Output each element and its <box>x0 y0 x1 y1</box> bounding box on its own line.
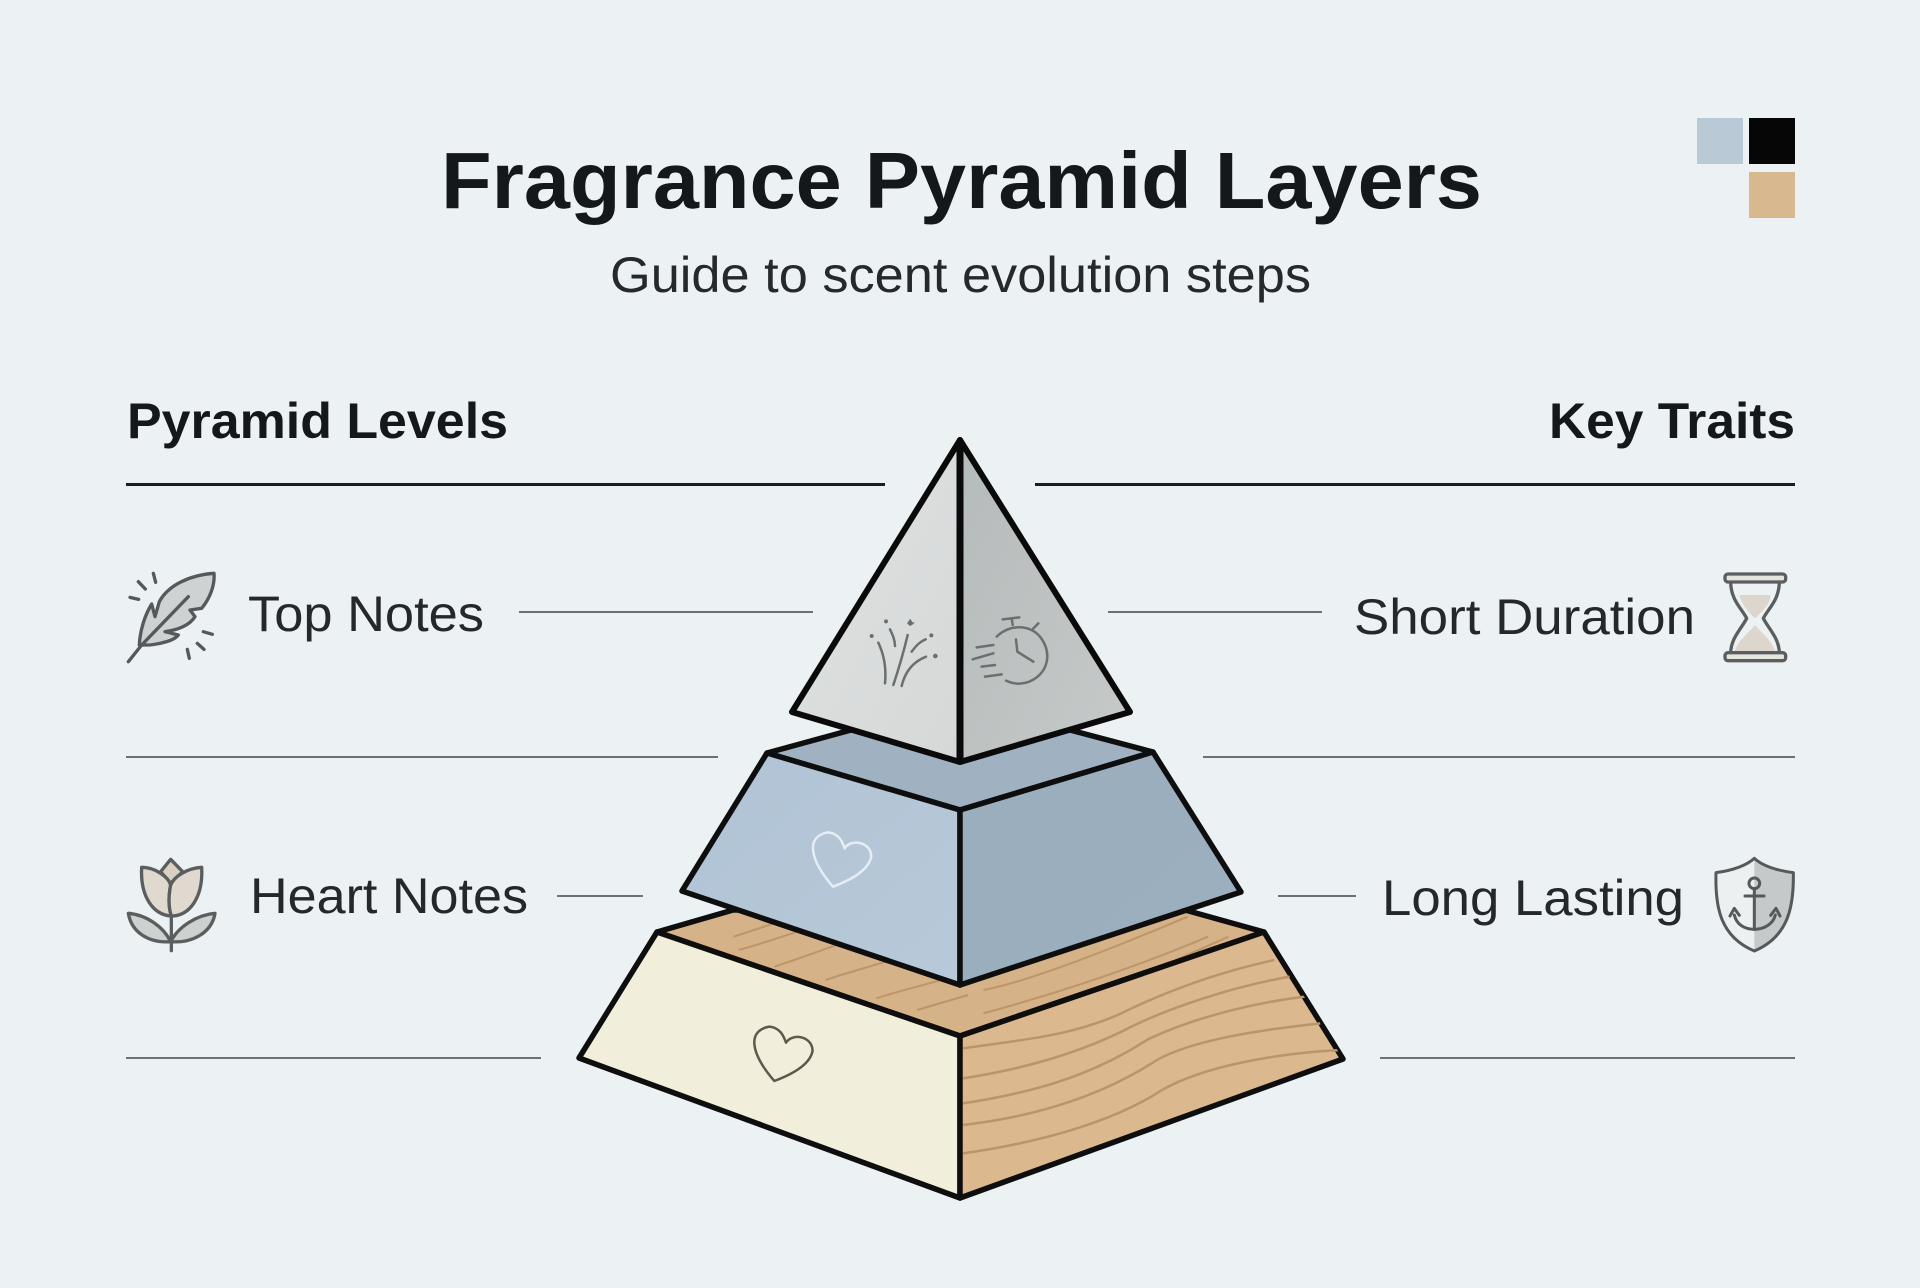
icon: stopwatch <box>973 617 1047 684</box>
colour swatches <box>1697 118 1795 218</box>
middle top plate <box>767 730 1153 810</box>
base right face <box>960 932 1343 1198</box>
left column heading: Pyramid Levels <box>127 393 508 449</box>
top left face <box>792 440 960 762</box>
label: long lasting: Long Lasting <box>1382 870 1684 926</box>
label: short duration: Short Duration <box>1354 589 1695 645</box>
subtitle: Guide to scent evolution steps <box>610 247 1311 303</box>
icon: feather <box>128 573 214 662</box>
base layer: wood and cream <box>579 910 1343 1198</box>
base top plate grain <box>733 917 1228 1018</box>
middle left face <box>682 753 960 985</box>
top centre edge <box>956 440 964 762</box>
icon: tulip <box>128 859 215 951</box>
icon: white heart on blue face <box>813 832 871 887</box>
icon: fireworks <box>870 619 938 686</box>
icon: hourglass <box>1725 574 1786 661</box>
base right face grain <box>963 960 1341 1153</box>
top right face <box>960 440 1130 762</box>
icon: anchor shield <box>1716 858 1793 951</box>
pyramid <box>579 440 1343 1198</box>
middle right face <box>960 752 1241 985</box>
top layer: stone cone <box>792 440 1130 762</box>
label: top notes: Top Notes <box>248 586 484 642</box>
base top plate <box>657 910 1264 1036</box>
icon: outline heart on cream face <box>754 1027 813 1081</box>
middle layer: blue <box>682 730 1241 985</box>
base left face <box>579 932 960 1198</box>
title: Fragrance Pyramid Layers <box>441 136 1482 225</box>
label: heart notes: Heart Notes <box>250 868 528 924</box>
right column heading: Key Traits <box>1549 393 1795 449</box>
